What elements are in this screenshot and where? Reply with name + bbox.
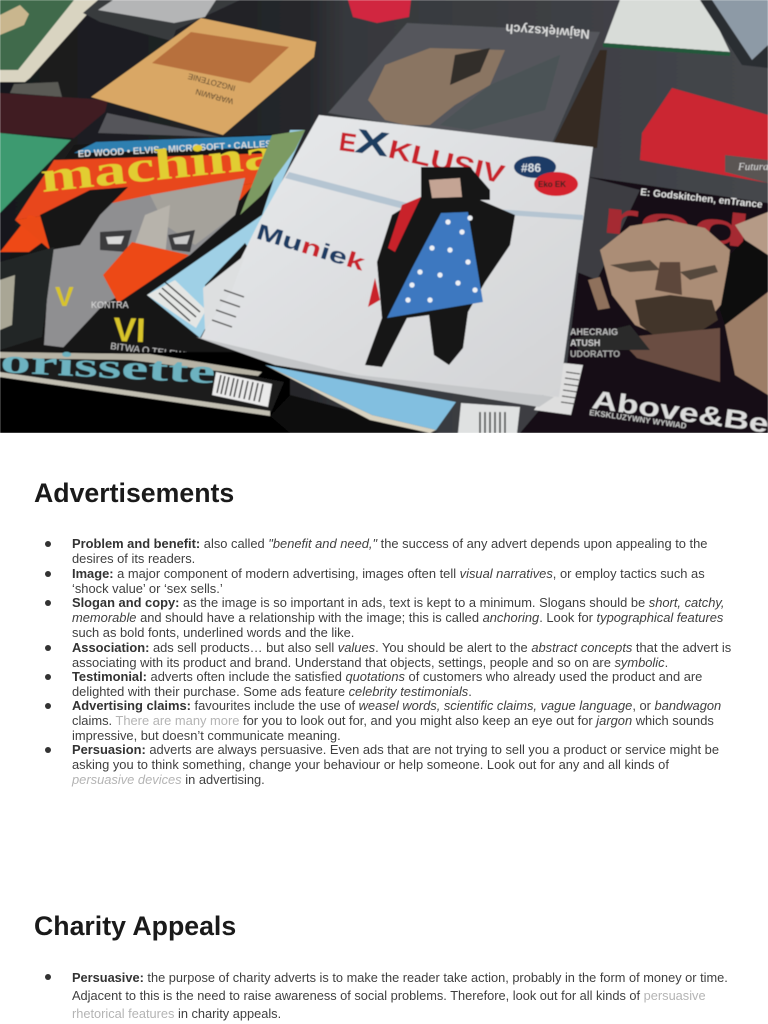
machina magazine: ED WOOD • ELVIS • MICROSOFT • CALLES: [78, 139, 272, 160]
bulleted list: advertisement features: Slogan and copy: as the image is so important in ads, text is kept to a minimum. Slogans should be short, catchy,: [72, 595, 724, 610]
red box: Futura: [737, 161, 768, 173]
bulleted list: charity appeal features: Adjacent to this is the need to raise awareness of social problems. Therefore, look out for all kinds of persuasive: [72, 988, 706, 1003]
bulleted list: advertisement features: Persuasion: adverts are always persuasive. Even ads that are not trying to sell you a product or service might be: [72, 742, 719, 757]
machina magazine: machina: [38, 129, 278, 202]
bulleted list: charity appeal features: rhetorical features in charity appeals.: [72, 1006, 281, 1021]
orange paperback: [91, 18, 316, 137]
Exklusiv magazine cover: Mu niek: [254, 219, 369, 276]
orissette magazine strip: [0, 343, 290, 433]
machina magazine: BITWA O TELEWIZOR: [110, 341, 208, 364]
two women faces: [44, 178, 245, 350]
Exklusiv magazine cover: E: [337, 126, 359, 158]
bulleted list: advertisement features: ‘shock value’ or ‘sex sells.’: [72, 581, 223, 596]
clear sleeve top right: [603, 0, 730, 56]
orange paperback: INGZOTENIE: [187, 71, 237, 93]
blue magazine under cover: [147, 130, 520, 433]
bulleted list: advertisement features: impressive, but doesn’t communicate meaning.: [72, 728, 341, 743]
bulleted list: advertisement features: asking you to think something, change your behaviour or help someone. Look out for any and all kinds of: [72, 757, 669, 772]
red cylinder: [348, 0, 411, 23]
right magazine with two men: UDORATTO: [570, 349, 620, 359]
bulleted list: advertisement features: associating with its product and brand. Understand that objects, settings, people and so on are symbolic.: [72, 655, 668, 670]
bulleted list: advertisement features: persuasive devices in advertising.: [72, 772, 265, 787]
Exklusiv magazine cover: KLUSIV: [386, 134, 508, 190]
right magazine with two men: [520, 177, 768, 439]
upside-down grey magazine: ulnem: [472, 133, 546, 169]
Exklusiv magazine cover: Eko EK: [538, 180, 566, 189]
bulleted list: advertisement features: Problem and benefit: also called "benefit and need," the success of any advert depends upon appealing to the: [72, 536, 707, 551]
bulleted list: advertisement features: delighted with their purchase. Some ads feature celebrity testimonials.: [72, 684, 472, 699]
Exklusiv magazine cover: X: [353, 122, 392, 165]
bulleted list: advertisement features: Image: a major component of modern advertising, images often tell visual narratives, or employ tactics such as: [72, 566, 705, 581]
figure with American flag cape: [365, 167, 515, 367]
right magazine with two men: AHECRAIG: [570, 327, 618, 337]
bulleted list: advertisement features: memorable and should have a relationship with the image; this is called anchoring. Look for typographical features: [72, 610, 723, 625]
black lower table: [270, 395, 440, 433]
bulleted list: advertisement features: Testimonial: adverts often include the satisfied quotations of customers who already used the product and are: [72, 669, 702, 684]
bulleted list: charity appeal features: Persuasive: the purpose of charity adverts is to make the reader take action, probably in the form of money or time.: [72, 970, 728, 985]
dark magazine top right: [700, 0, 768, 68]
heading: Charity Appeals: Charity Appeals: [34, 911, 236, 941]
bulleted list: advertisement features: Advertising claims: favourites include the use of weasel words, scientific claims, vague language, or bandwagon: [72, 698, 721, 713]
machina magazine: KONTRA: [91, 300, 129, 310]
Exklusiv magazine cover: [196, 115, 593, 407]
upside-down grey magazine: [328, 21, 607, 169]
hero photo: pile of magazines on a table: [0, 0, 768, 433]
machina magazine: [0, 129, 290, 364]
right magazine with two men: ATUSH: [570, 338, 600, 348]
right magazine with two men: Above&Be: [590, 384, 768, 433]
machina magazine: V: [55, 281, 74, 312]
machina magazine: VI: [113, 311, 146, 350]
orissette magazine strip: orissette: [0, 343, 216, 391]
bulleted list: advertisement features: claims. There are many more for you to look out for, and you might also keep an eye out for jargon which sounds: [72, 713, 714, 728]
bulleted list: advertisement features: such as bold fonts, underlined words and the like.: [72, 625, 354, 640]
orange paperback: WARAWIN: [194, 87, 235, 106]
heading: Advertisements: Advertisements: [34, 478, 234, 508]
bulleted list: advertisement features: desires of its readers.: [72, 551, 195, 566]
right magazine with two men: EKSKLUZYWNY WYWIAD: [589, 408, 687, 431]
bulleted list: advertisement features: Association: ads sell products… but also sell values. You should be alert to the abstract concepts that the advert is: [72, 640, 731, 655]
red box: [640, 88, 768, 183]
right magazine with two men: red: [599, 190, 754, 258]
upside-down grey magazine: Największych: [505, 21, 590, 42]
Exklusiv magazine cover: #86: [521, 161, 541, 175]
books top left: [0, 0, 240, 213]
right magazine with two men: E: Godskitchen, enTrance: [640, 187, 763, 211]
